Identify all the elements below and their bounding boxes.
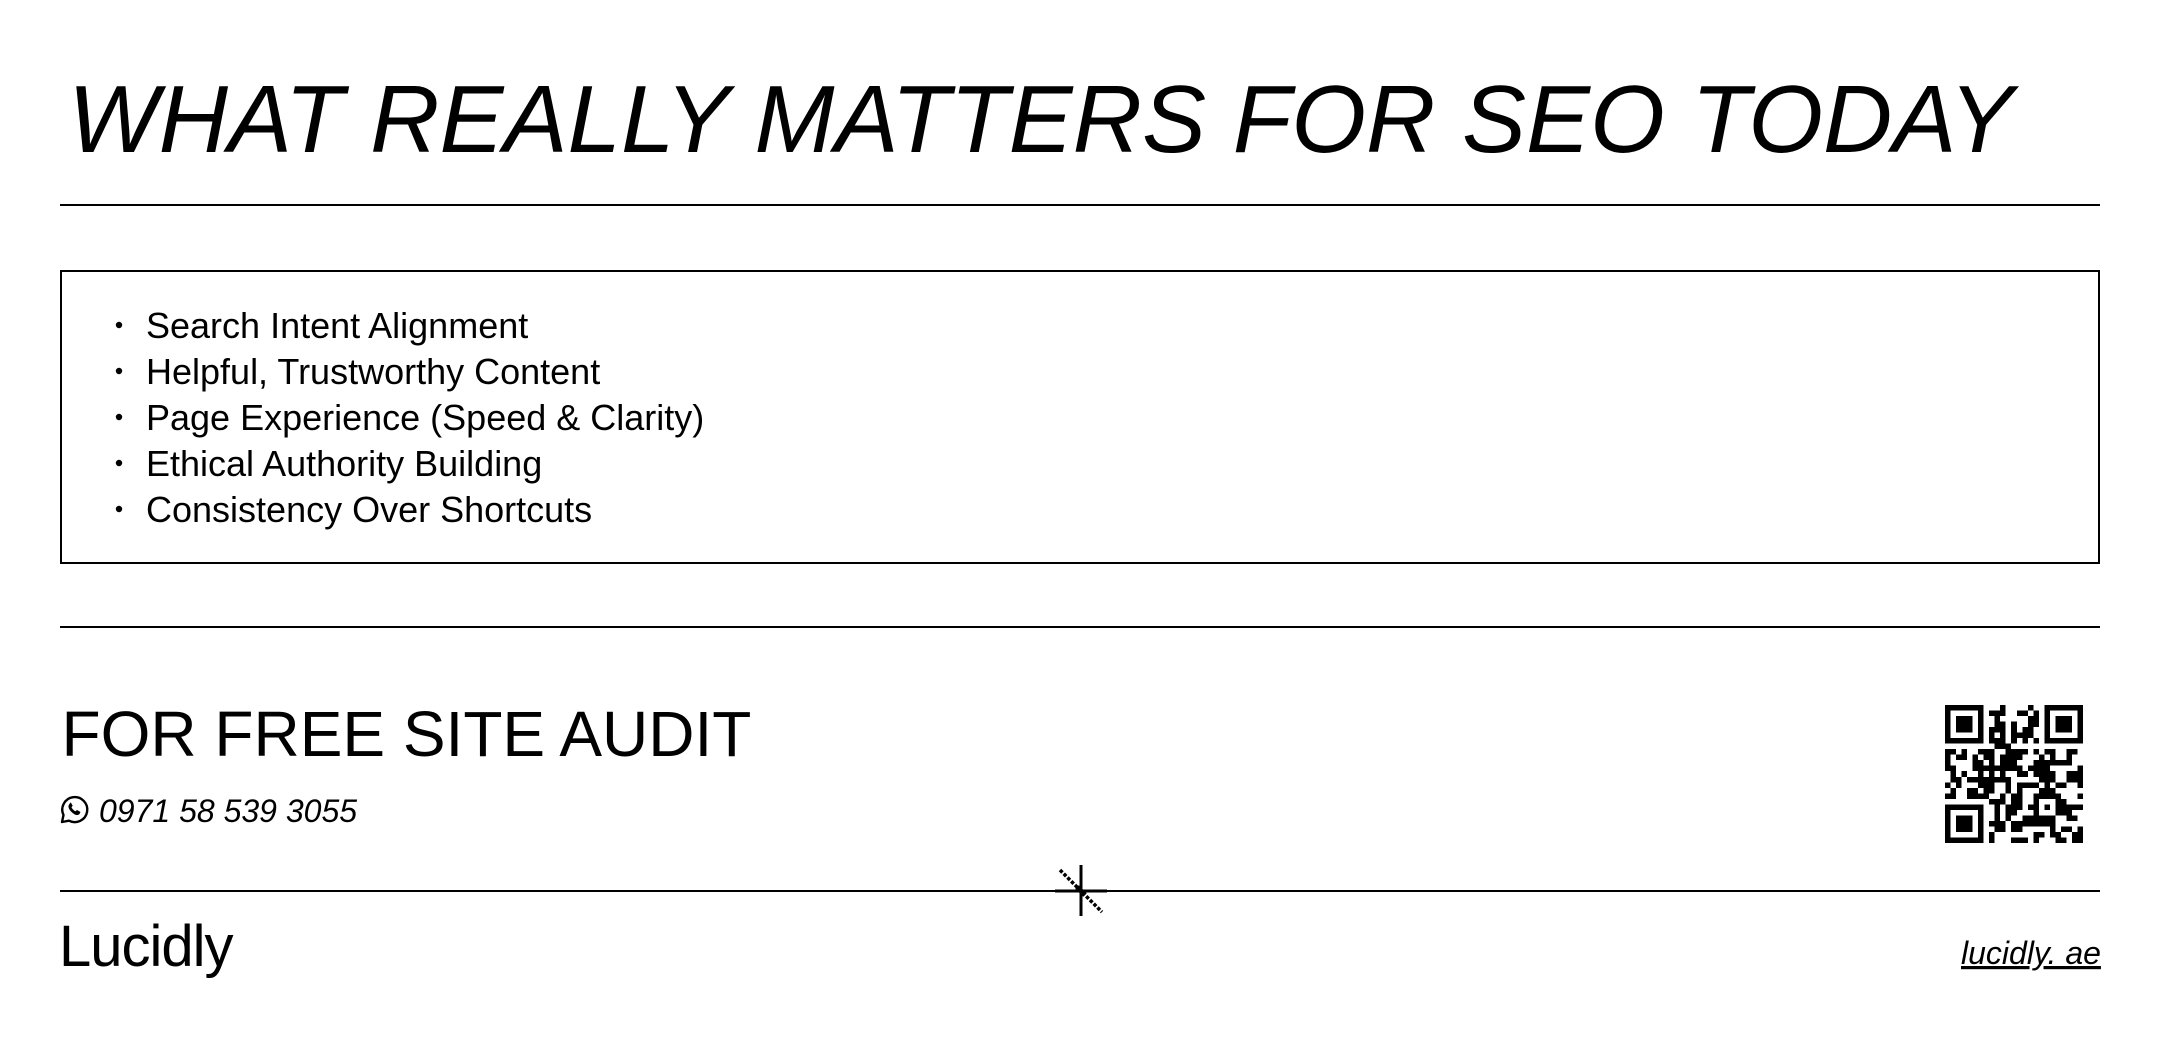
icon: whatsapp [62, 797, 87, 822]
list item: search intent: Search Intent Alignment [146, 305, 528, 346]
panel: key SEO factors list [61, 271, 2099, 563]
logo: Lucidly: Lucidly [59, 914, 234, 979]
title: WHAT REALLY MATTERS FOR SEO TODAY [68, 66, 2019, 173]
list item: helpful content: Helpful, Trustworthy Content [146, 351, 600, 392]
list item: consistency: Consistency Over Shortcuts [146, 489, 592, 530]
list item: ethical authority: Ethical Authority Building [146, 443, 542, 484]
website link: lucidly. ae [1961, 935, 2101, 971]
call to action heading: FOR FREE SITE AUDIT [62, 698, 751, 770]
icon: star mark on divider [1055, 865, 1107, 916]
QR code [1945, 705, 2083, 843]
list item: page experience: Page Experience (Speed & Clarity) [146, 397, 704, 438]
phone number: 0971 58 539 3055 [99, 793, 357, 829]
